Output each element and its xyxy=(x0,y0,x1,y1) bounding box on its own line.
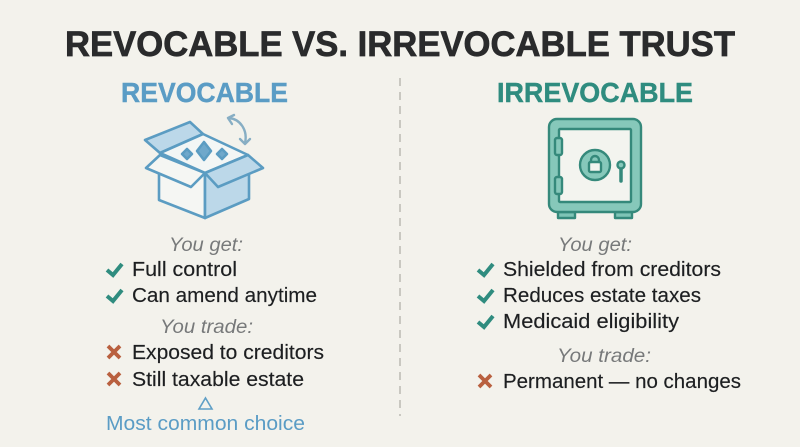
drawback: still taxable estate: Still taxable estate xyxy=(132,369,304,391)
drawback: permanent: Permanent — no changes xyxy=(503,371,741,393)
you trade label: You trade: xyxy=(557,346,651,367)
icon: safe xyxy=(549,119,641,218)
benefit: full control: Full control xyxy=(132,259,237,281)
title: REVOCABLE VS. IRREVOCABLE TRUST xyxy=(65,24,735,64)
you get label: You get: xyxy=(169,235,243,256)
benefit: shielded from creditors: Shielded from creditors xyxy=(503,259,721,281)
panel: irrevocable xyxy=(478,77,741,393)
triangle marker xyxy=(199,398,212,409)
benefit: medicaid eligibility: Medicaid eligibility xyxy=(503,311,679,333)
benefit: reduces estate taxes: Reduces estate taxes xyxy=(503,285,701,307)
heading: irrevocable: IRREVOCABLE xyxy=(497,77,693,108)
panel: revocable xyxy=(106,77,324,435)
drawback: exposed to creditors: Exposed to creditors xyxy=(132,342,324,364)
you get label: You get: xyxy=(558,235,632,256)
icon: open box with diamonds xyxy=(145,115,263,218)
you trade label: You trade: xyxy=(160,317,253,338)
heading: revocable: REVOCABLE xyxy=(121,77,288,108)
callout: most common choice: Most common choice xyxy=(106,413,305,435)
benefit: can amend anytime: Can amend anytime xyxy=(132,285,317,307)
